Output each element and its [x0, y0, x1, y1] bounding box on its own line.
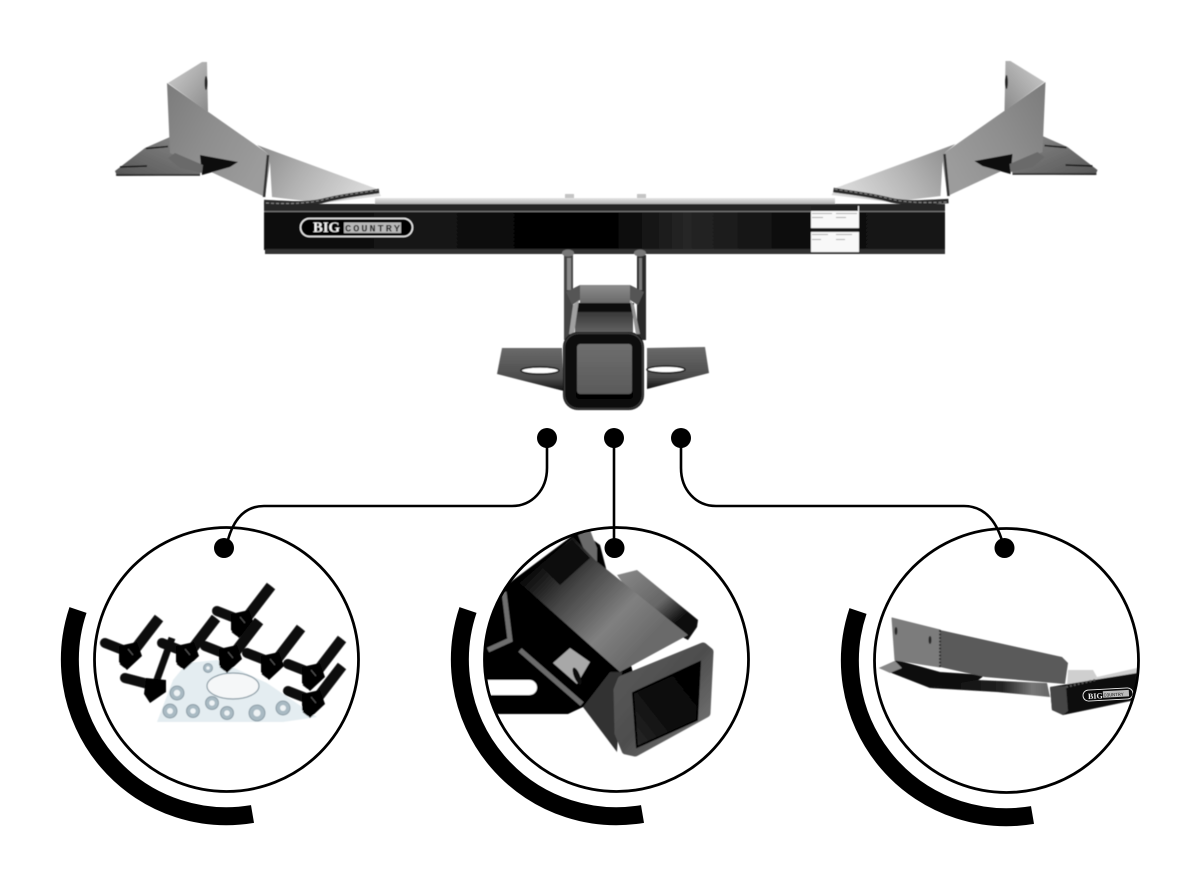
- receiver assembly: [497, 250, 709, 410]
- logo: Big Country (inset): BIG: [1088, 691, 1103, 701]
- logo: Big Country (inset): [1083, 688, 1133, 701]
- thick arc: [460, 610, 642, 816]
- thick arc: [70, 610, 252, 816]
- bracket photo: [879, 618, 1137, 715]
- logo: Big Country: COUNTRY: [345, 224, 401, 236]
- thick arc: [850, 611, 1032, 817]
- right mounting bracket: [832, 61, 1098, 203]
- cross bar: [264, 194, 945, 254]
- circle outline: [484, 528, 748, 792]
- panel: receiver tube close-up: [460, 528, 748, 816]
- connector: left: [226, 428, 557, 548]
- marker dot: [214, 538, 234, 558]
- panel: bracket close-up: [850, 528, 1138, 817]
- logo: Big Country: [300, 218, 412, 236]
- logo: Big Country: BIG: [313, 220, 340, 236]
- capacity label: [811, 206, 859, 252]
- connector: right: [671, 428, 1004, 548]
- panel: hardware kit: [70, 528, 358, 816]
- hardware photo: [105, 586, 342, 722]
- marker dot: [604, 538, 624, 558]
- receiver photo: [470, 530, 709, 752]
- circle outline: [94, 528, 358, 792]
- logo: Big Country (inset): COUNTRY: [1103, 692, 1124, 699]
- left mounting bracket: [115, 62, 381, 204]
- hitch: main product photo: [115, 61, 1098, 410]
- marker dot: [994, 538, 1014, 558]
- connector: centre: [604, 428, 624, 548]
- circle outline: [874, 528, 1138, 792]
